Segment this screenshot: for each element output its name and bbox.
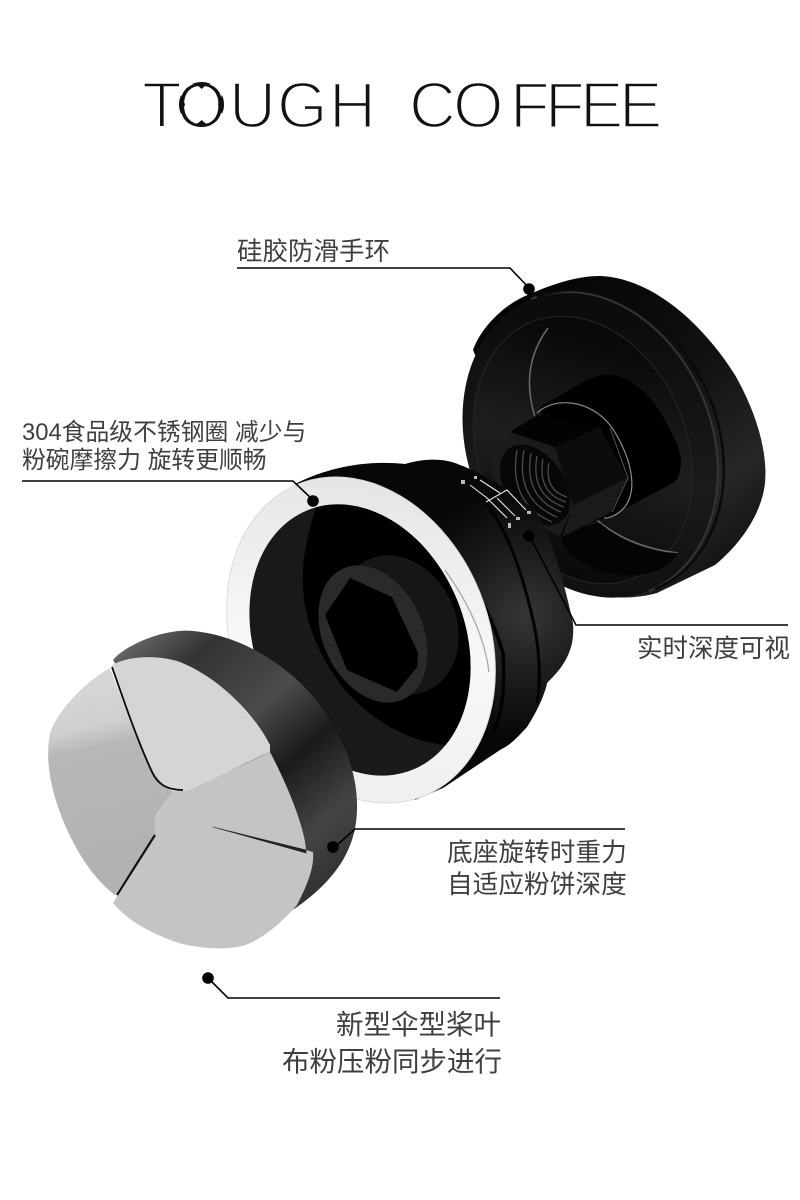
shaft	[540, 375, 681, 530]
label: depth window	[524, 530, 790, 663]
label: umbrella paddle: 布粉压粉同步进行	[282, 1046, 502, 1077]
label: umbrella paddle: 新型伞型桨叶	[336, 1009, 501, 1040]
label: 304 steel ring: 304食品级不锈钢圈 减少与	[22, 419, 306, 446]
label: umbrella paddle	[202, 972, 502, 1077]
product: silicone grip top section	[462, 276, 766, 598]
label: silicone grip: 硅胶防滑手环	[237, 238, 390, 266]
nut	[500, 415, 627, 537]
label: gravity self-adapting base	[327, 829, 627, 899]
label: gravity self-adapting base: 底座旋转时重力	[447, 838, 627, 867]
label: silicone grip	[237, 238, 535, 295]
label: depth window: 实时深度可视	[637, 635, 790, 663]
label: gravity self-adapting base: 自适应粉饼深度	[447, 870, 627, 899]
icon: logo O lobes	[179, 82, 224, 127]
inner face	[210, 471, 510, 809]
label: 304 steel ring: 粉碗摩擦力 旋转更顺畅	[22, 447, 267, 474]
title: TOUGH COFFEE logo: TOUGHCOFFEE	[142, 68, 662, 142]
product: middle base with steel ring	[226, 460, 574, 804]
product: leveler paddle puck	[48, 631, 357, 948]
label: 304 steel ring	[22, 419, 319, 507]
depth scale	[461, 476, 531, 528]
steel ring	[179, 436, 543, 844]
